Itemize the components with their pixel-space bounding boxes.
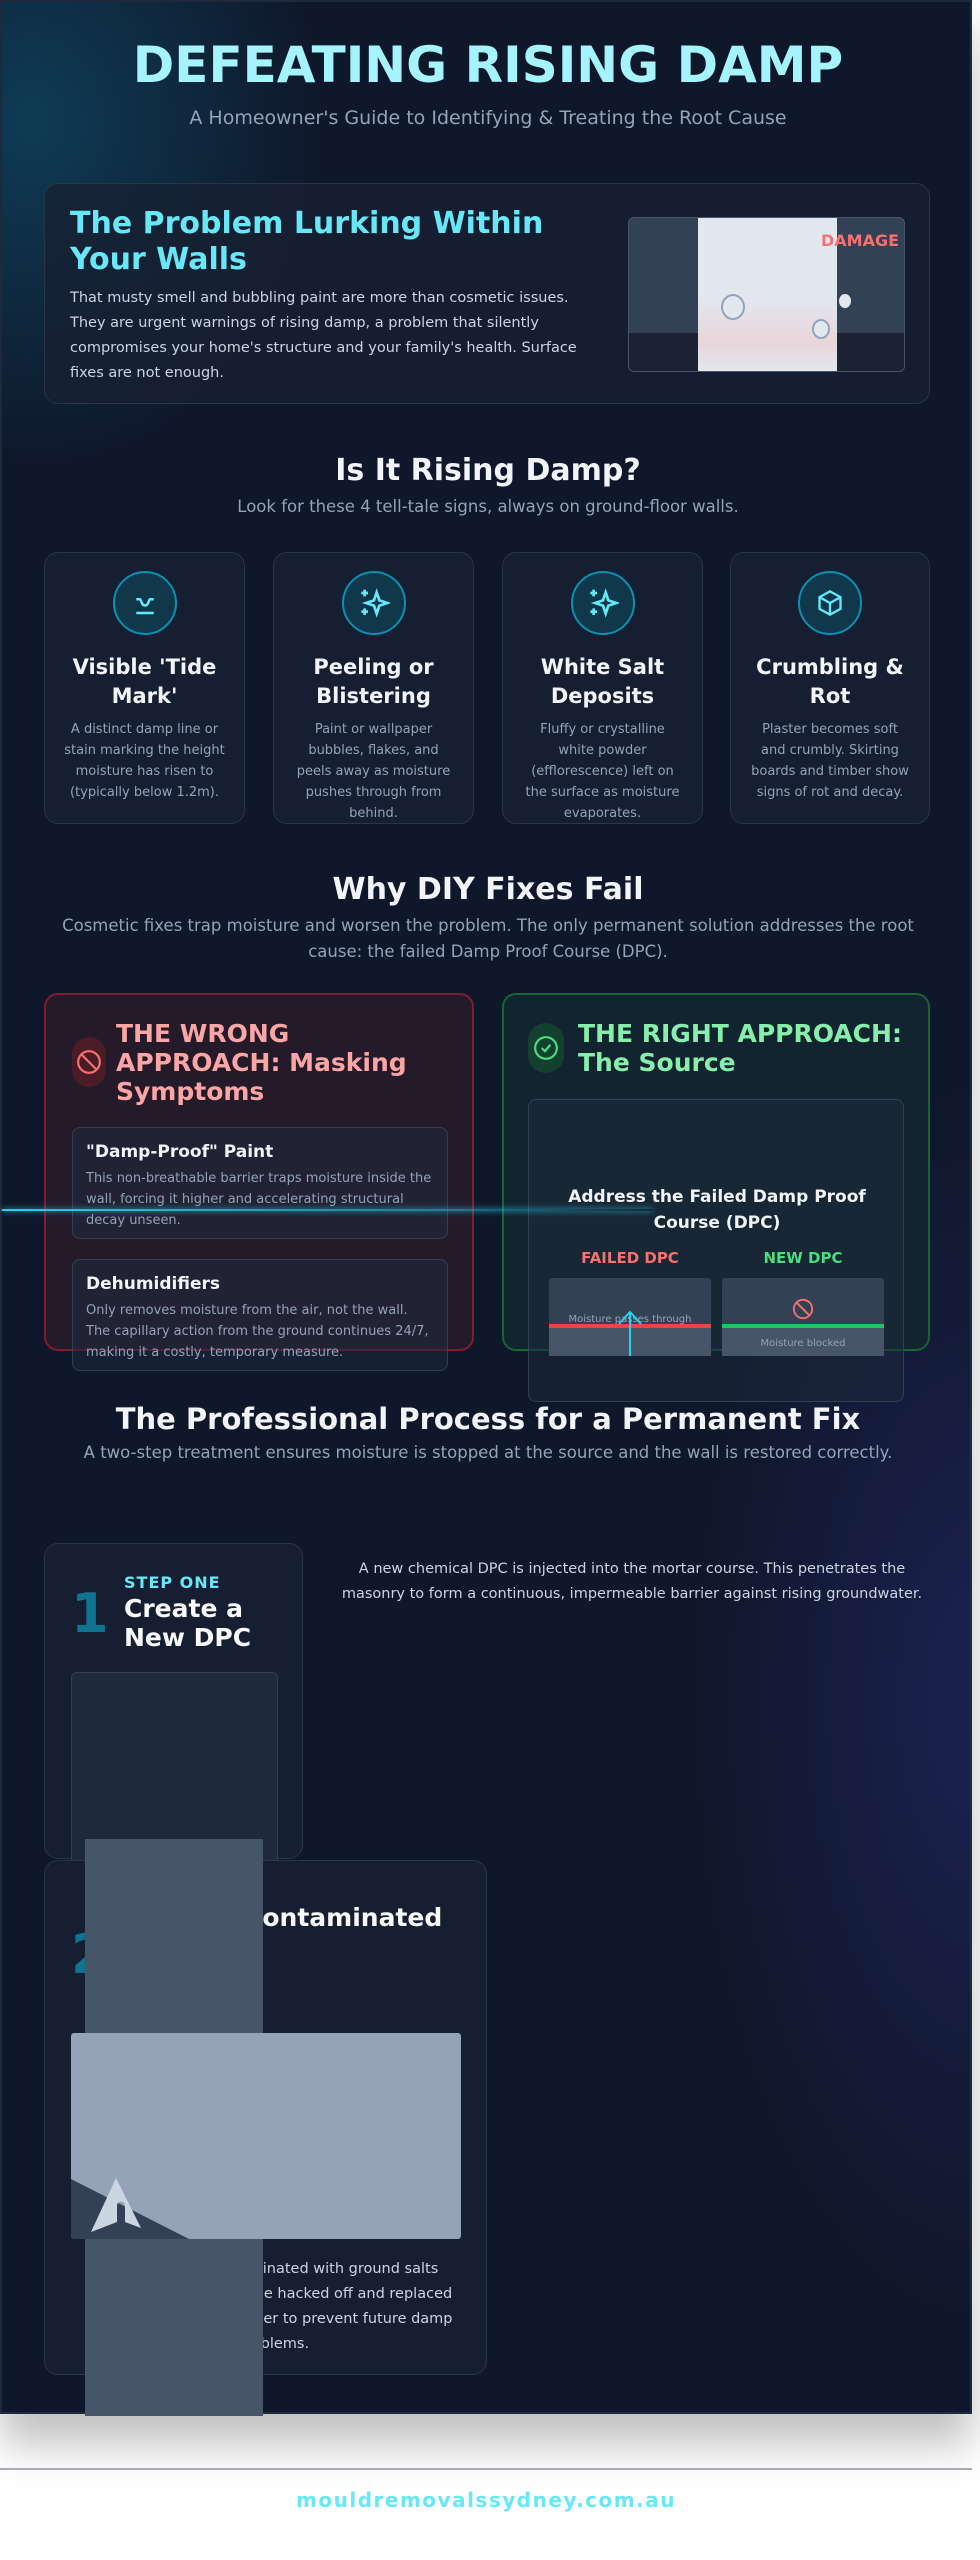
step number: 2 [71,1923,109,1986]
icon: prohibited [72,1037,106,1087]
item: paint [72,1127,448,1239]
new wall [722,1278,884,1356]
panel: sign salt: Fluffy or crystalline white powder (efflorescence) left on the surface as moisture evaporates. [526,722,679,821]
heading: Why DIY Fixes Fail: Why DIY Fixes Fail [332,872,644,907]
failed wall [549,1278,711,1356]
right heading: THE RIGHT APPROACH: The Source [578,1019,902,1077]
panel: sign peeling: Peeling or Blistering [313,655,434,708]
icon: tide mark [112,571,176,635]
step title: New DPC [124,1623,251,1652]
step title: Replace Contaminated [124,1903,442,1932]
step number: 1 [71,1582,109,1645]
footer url: mouldremovalssydney.com.au [296,2488,676,2512]
diagram: DPC comparison [528,1099,904,1402]
panel: step two [44,1860,487,2375]
subheading: A two-step treatment ensures moisture is stopped at the source and the wall is restored correctly. [84,1443,892,1462]
panel: sign crumbling [730,552,930,824]
glowing line [2,1209,652,1211]
title: DEFEATING RISING DAMP [133,36,843,94]
step one text: A new chemical DPC is injected into the mortar course. This penetrates the masonry to form a continuous, impermeable barrier against rising groundwater. [342,1561,922,1602]
item: dehumidifiers: Only removes moisture from the air, not the wall. The capillary action from the ground continues 24/7, making it a costly, temporary measure. [86,1303,429,1360]
subheading: Cosmetic fixes trap moisture and worsen the problem. The only permanent solution addresses the root cause: the failed Damp Proof Course (DPC). [62,916,914,961]
panel: sign tide mark [44,552,245,824]
heading: professional process: The Professional Process for a Permanent Fix [116,1402,860,1436]
panel: sign peeling: Paint or wallpaper bubbles, flakes, and peels away as moisture pushes through from behind. [297,722,450,821]
panel: step one [44,1543,303,1859]
diagram heading: Course (DPC) [654,1213,780,1233]
icon: sparkle [570,571,634,635]
new wall: Moisture blocked [761,1338,845,1349]
panel: wrong approach [44,993,474,1351]
label failed: FAILED DPC [581,1249,679,1267]
panel: sign tide mark: A distinct damp line or stain marking the height moisture has risen to (typically below 1.2m). [64,722,225,800]
illustration: damaged wall [628,217,905,372]
damage label: DAMAGE [821,231,899,250]
step title: Create a [124,1594,243,1623]
panel: sign crumbling: Crumbling & Rot [756,655,904,708]
icon: cube [798,571,862,635]
item: dehumidifiers [72,1259,448,1371]
illustration box: step two [71,2033,461,2239]
step label: STEP ONE [124,1573,221,1592]
item: paint: "Damp-Proof" Paint [86,1142,273,1162]
failed wall: Moisture passes through [569,1314,691,1325]
diagram heading [568,1187,866,1233]
wrong heading: THE WRONG APPROACH: Masking Symptoms [116,1019,407,1106]
item: dehumidifiers: Dehumidifiers [86,1274,220,1294]
panel: sign salt: White Salt Deposits [541,655,664,708]
icon: check [528,1023,564,1073]
problem text: That musty smell and bubbling paint are more than cosmetic issues. They are urgent warnings of rising damp, a problem that silently compromises your home's structure and your family's health. Surface fixes are not enough. [70,290,577,381]
step title [124,1594,251,1652]
image placeholder [71,1672,278,1879]
icon: sparkle [342,571,406,635]
subtitle: A Homeowner's Guide to Identifying & Treating the Root Cause [189,107,787,129]
subheading: Look for these 4 tell-tale signs, always on ground-floor walls. [237,497,739,516]
diagram heading: Address the Failed Damp Proof [568,1187,866,1207]
item: paint: This non-breathable barrier traps moisture inside the wall, forcing it higher and accelerating structural decay unseen. [86,1171,431,1228]
panel: sign peeling [273,552,474,824]
panel: sign tide mark: Visible 'Tide Mark' [73,655,216,708]
panel: right approach [502,993,930,1351]
heading: Is It Rising Damp: Is It Rising Damp? [335,453,641,488]
label new: NEW DPC [763,1249,843,1267]
footer divider [0,2468,972,2470]
step two text: Old plaster is contaminated with ground salts and moisture. It must be hacked off and replaced with salt-resistant plaster to prevent future damp problems. [93,2261,453,2352]
panel: problem intro [44,183,930,404]
stray code text: `); } [85,1863,111,1877]
panel: sign crumbling: Plaster becomes soft and crumbly. Skirting boards and timber show signs of rot and decay. [751,722,909,800]
problem heading: The Problem Lurking Within Your Walls [70,206,543,277]
overlay bar [85,1839,263,2416]
icon: arrow [91,2178,141,2232]
panel: sign salt [502,552,703,824]
